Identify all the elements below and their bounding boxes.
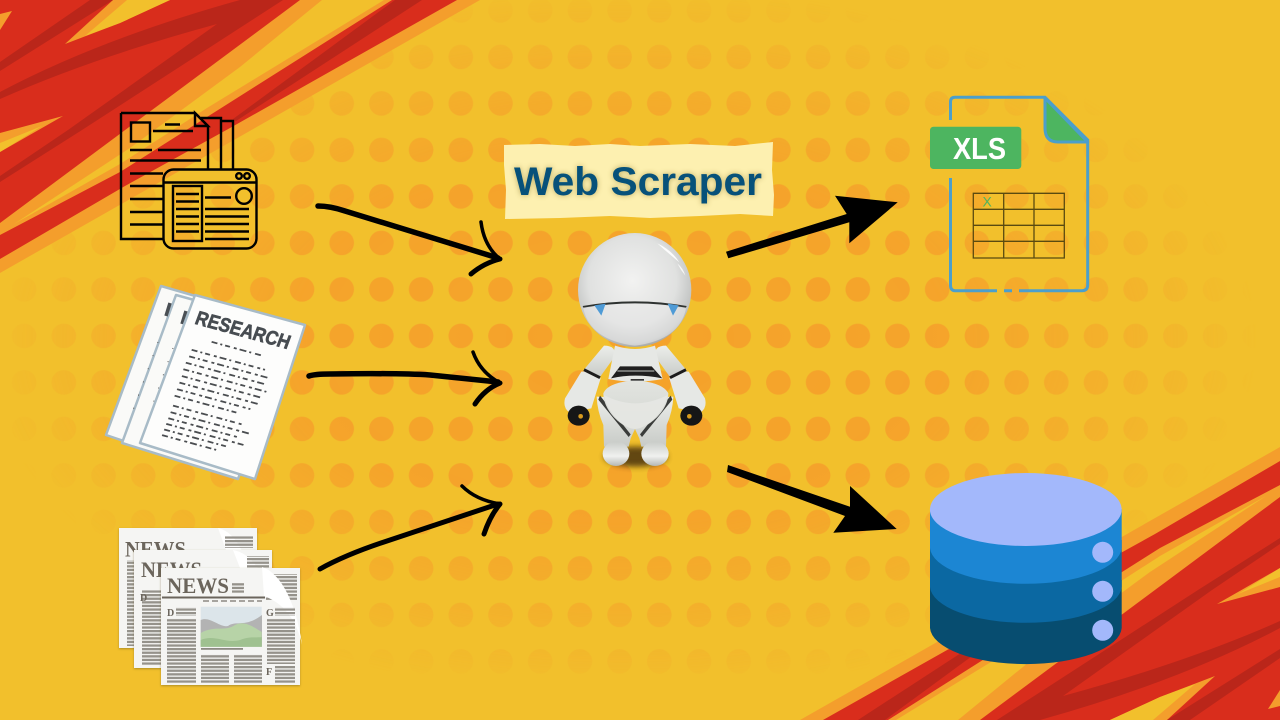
database top layer	[930, 509, 1122, 584]
robot head	[578, 233, 691, 347]
newspaper middle: D	[140, 593, 147, 604]
arrow: robot to spreadsheet	[726, 196, 898, 258]
front paper sheet	[140, 295, 305, 479]
XLS badge	[930, 127, 1021, 169]
newspaper front: D	[167, 608, 174, 619]
robot arms	[564, 346, 706, 426]
back paper	[106, 286, 278, 474]
arrow: research papers to robot	[309, 352, 500, 404]
newspaper back: NEWS	[125, 536, 186, 562]
icon: XLS spreadsheet file	[930, 97, 1088, 291]
burst: top left	[0, 0, 480, 273]
newspaper front: G	[266, 608, 274, 619]
newspaper front: F	[266, 667, 272, 678]
file fold	[1045, 98, 1088, 142]
news picture	[201, 607, 262, 647]
file outline	[950, 97, 1088, 291]
spreadsheet grid	[973, 193, 1064, 258]
arrow: newspapers to robot	[320, 486, 500, 569]
newspaper front: NEWS	[167, 573, 229, 598]
paper body text	[159, 337, 278, 457]
robot shadow	[604, 447, 667, 467]
icon: research papers	[106, 286, 305, 479]
XLS badge: XLS	[953, 131, 1006, 166]
title label: Web Scraper	[514, 160, 762, 204]
robot legs	[597, 396, 673, 466]
newspaper front	[161, 567, 302, 685]
burst: bottom right	[800, 447, 1280, 720]
newspaper middle	[134, 550, 272, 668]
newspaper back	[119, 528, 257, 648]
database middle layer	[930, 540, 1122, 623]
title label	[504, 142, 774, 219]
database bottom layer	[930, 580, 1122, 664]
arrow: web documents to robot	[318, 206, 500, 274]
front paper content	[153, 308, 293, 458]
icon: newspapers	[119, 528, 302, 685]
newspaper middle: NEWS	[141, 557, 202, 582]
arrow: robot to database	[727, 465, 897, 533]
database lid	[930, 473, 1122, 546]
paper title: RESEARCH	[192, 308, 293, 354]
icon: database	[930, 473, 1122, 664]
dot pattern	[62, 45, 1179, 653]
back paper marks	[166, 303, 186, 324]
spreadsheet grid: X	[982, 194, 992, 210]
robot	[564, 233, 706, 467]
back paper text ticks	[132, 342, 173, 413]
database lights	[1092, 542, 1113, 641]
middle paper	[122, 295, 292, 479]
icon: web documents	[121, 113, 256, 248]
robot torso	[603, 346, 668, 429]
